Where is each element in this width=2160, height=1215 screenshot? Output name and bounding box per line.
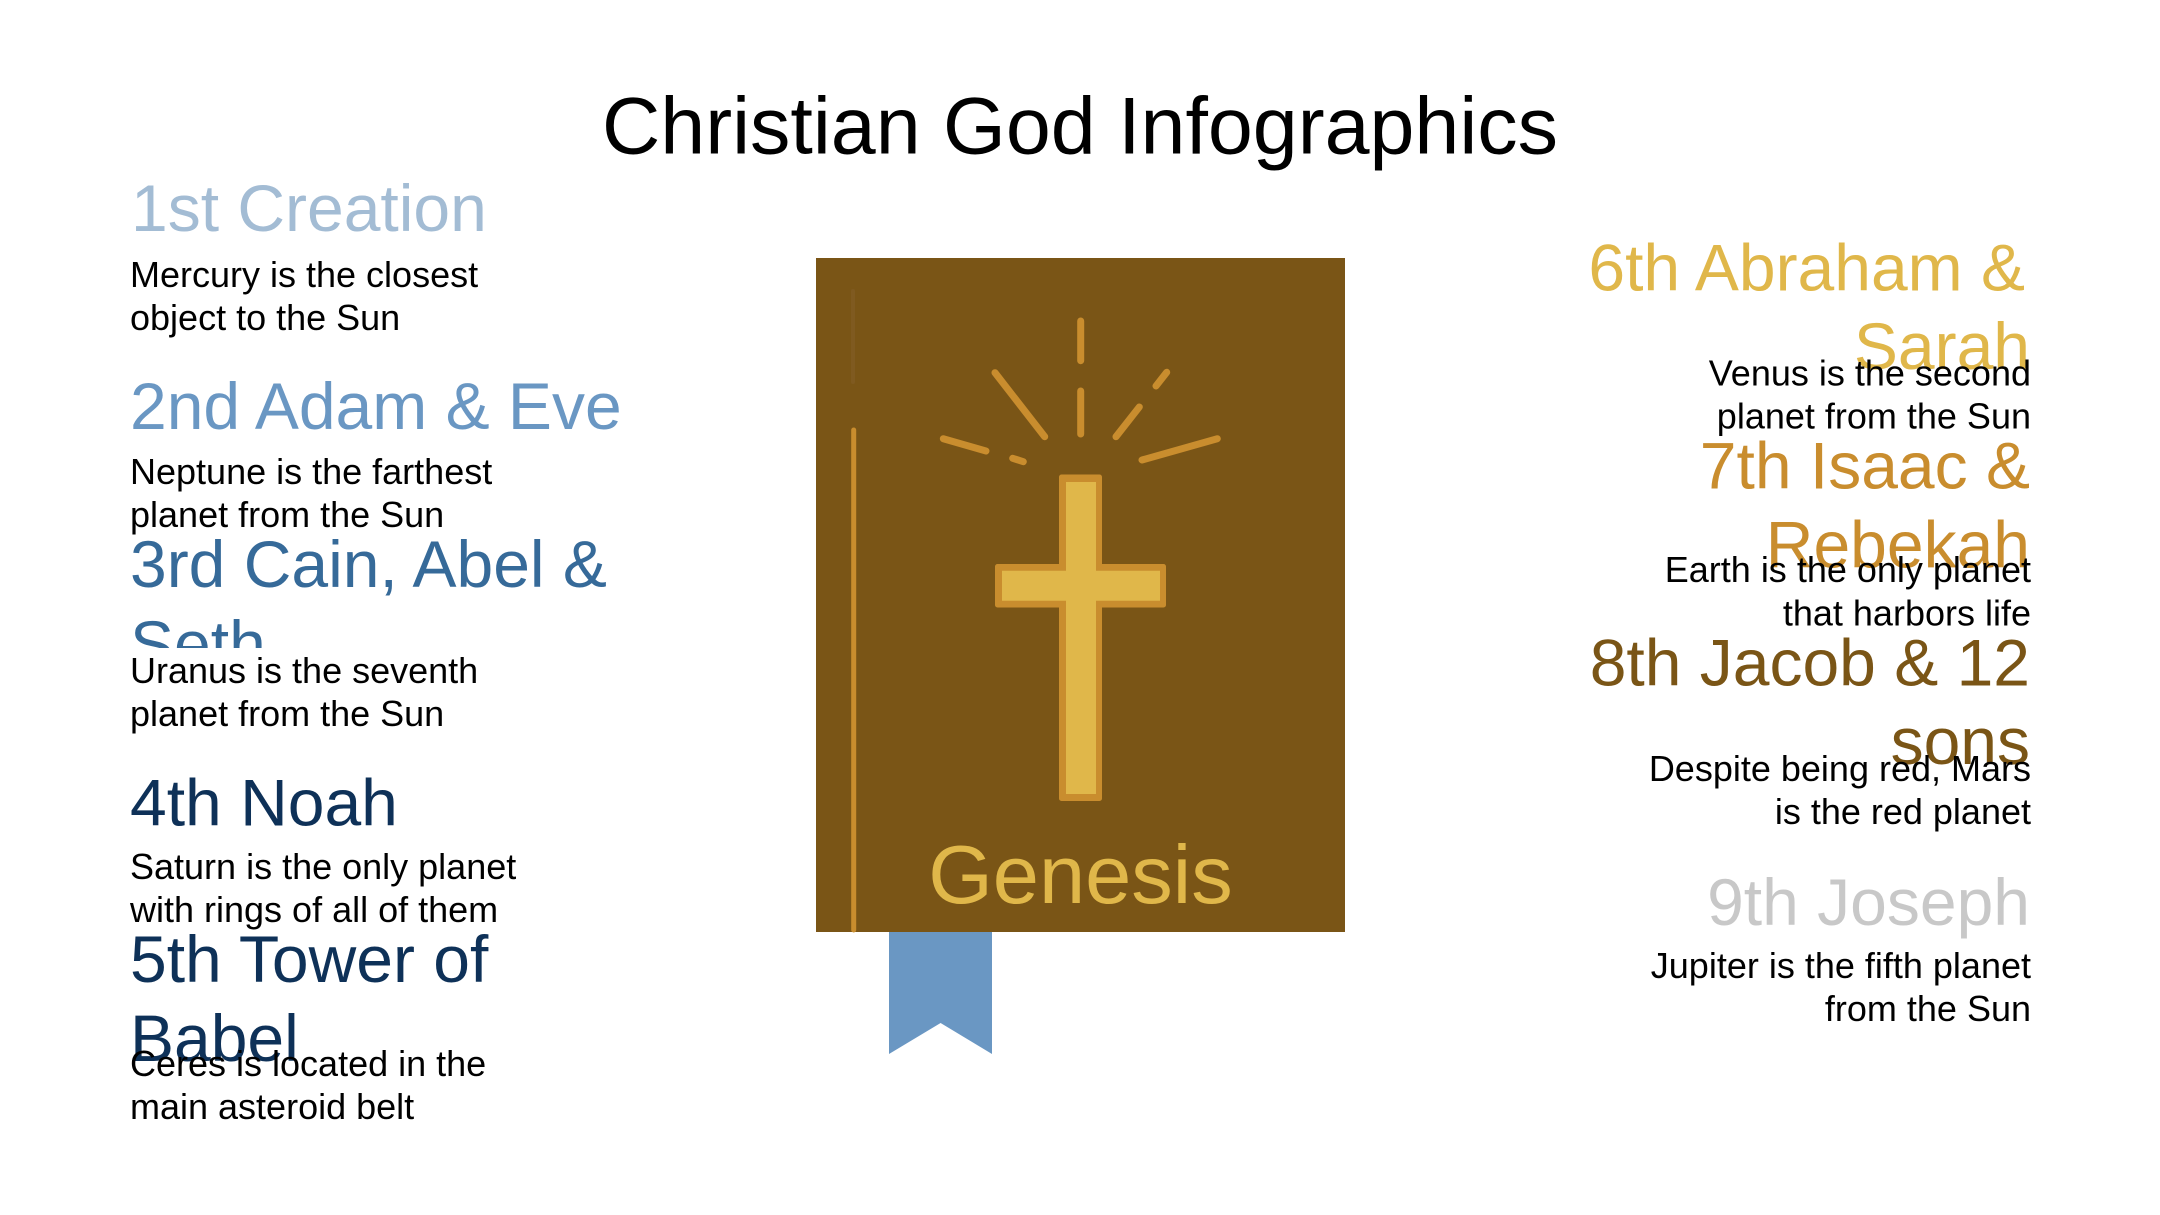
panel: 1st Creation	[130, 171, 487, 338]
panel: 4th Noah	[129, 766, 516, 930]
cover panel	[816, 258, 1345, 932]
description: Saturn: with rings of all of them	[129, 889, 498, 930]
description: Mars: Despite being red, Mars	[1649, 748, 2031, 789]
description: Venus	[1709, 352, 2031, 436]
description: Saturn	[129, 846, 516, 930]
description: Saturn: Saturn is the only planet	[130, 846, 516, 887]
title: Christian God Infographics	[602, 82, 1558, 172]
heading: 7th Isaac & Rebekah	[1700, 428, 2030, 582]
description: Uranus: planet from the Sun	[130, 693, 444, 734]
panel: 2nd Adam & Eve	[130, 369, 622, 535]
description: Venus: planet from the Sun	[1717, 396, 2031, 436]
heading: 8th Jacob & 12 sons: 8th Jacob & 12	[1590, 626, 2030, 700]
description: Mars: is the red planet	[1775, 791, 2031, 832]
panel: 3rd Cain, Abel & Seth	[130, 527, 607, 734]
panel: 9th Joseph	[1651, 865, 2031, 1029]
spine line	[850, 291, 856, 930]
panel: 6th Abraham & Sarah	[1588, 230, 2031, 436]
description: Jupiter: from the Sun	[1825, 988, 2031, 1029]
heading: 2nd Adam & Eve: 2nd Adam & Eve	[130, 369, 622, 443]
panel: 8th Jacob & 12 sons	[1590, 626, 2031, 832]
heading: 5th Tower of Babel: Babel	[130, 1001, 299, 1075]
description: Neptune: Neptune is the farthest	[130, 451, 492, 492]
book title: Genesis: Genesis	[928, 828, 1233, 921]
description: Uranus	[130, 650, 478, 734]
heading: 9th Joseph: 9th Joseph	[1707, 865, 2030, 939]
description: Mercury: object to the Sun	[130, 297, 400, 338]
description: Jupiter	[1651, 945, 2031, 1029]
heading: 3rd Cain, Abel & Seth	[132, 539, 606, 648]
description: Neptune	[130, 451, 492, 535]
description: Ceres: Ceres is located in the	[130, 1043, 486, 1084]
heading: 7th Isaac & Rebekah: 7th Isaac &	[1700, 428, 2030, 502]
heading: 5th Tower of Babel: 5th Tower of	[130, 922, 489, 996]
description: Mercury: Mercury is the closest	[130, 254, 478, 295]
description: Ceres	[130, 1043, 486, 1127]
book cover	[816, 258, 1345, 932]
description: Neptune: planet from the Sun	[130, 494, 444, 535]
icon: cross	[995, 474, 1166, 801]
description: Earth	[1665, 549, 2031, 634]
description: Venus: Venus is the second	[1709, 352, 2031, 394]
heading: 6th Abraham & Sarah: 6th Abraham &	[1588, 230, 2025, 304]
icon: light rays	[943, 321, 1217, 462]
bookmark ribbon	[889, 930, 992, 1054]
description: Ceres: main asteroid belt	[130, 1086, 414, 1127]
description: Mercury	[130, 254, 478, 338]
heading: 1st Creation: 1st Creation	[131, 171, 487, 245]
heading: 3rd Cain, Abel & Seth: Seth	[130, 607, 266, 681]
heading: 6th Abraham & Sarah: Sarah	[1854, 309, 2030, 383]
description: Earth: Earth is the only planet	[1665, 549, 2031, 590]
heading: 8th Jacob & 12 sons	[1590, 626, 2030, 778]
description: Mars	[1649, 748, 2031, 832]
description: Earth: that harbors life	[1783, 592, 2031, 634]
panel: 7th Isaac & Rebekah	[1665, 428, 2031, 634]
heading: 7th Isaac & Rebekah: Rebekah	[1766, 508, 2030, 582]
description: Jupiter: Jupiter is the fifth planet	[1651, 945, 2031, 986]
panel: 5th Tower of Babel	[130, 922, 489, 1127]
heading: 4th Noah: 4th Noah	[130, 766, 398, 840]
description: Uranus: Uranus is the seventh	[130, 650, 478, 691]
heading: 6th Abraham & Sarah	[1588, 230, 2030, 383]
heading: 8th Jacob & 12 sons: sons	[1891, 704, 2030, 778]
heading: 5th Tower of Babel	[130, 922, 489, 1075]
heading: 3rd Cain, Abel & Seth: 3rd Cain, Abel &	[130, 527, 607, 601]
